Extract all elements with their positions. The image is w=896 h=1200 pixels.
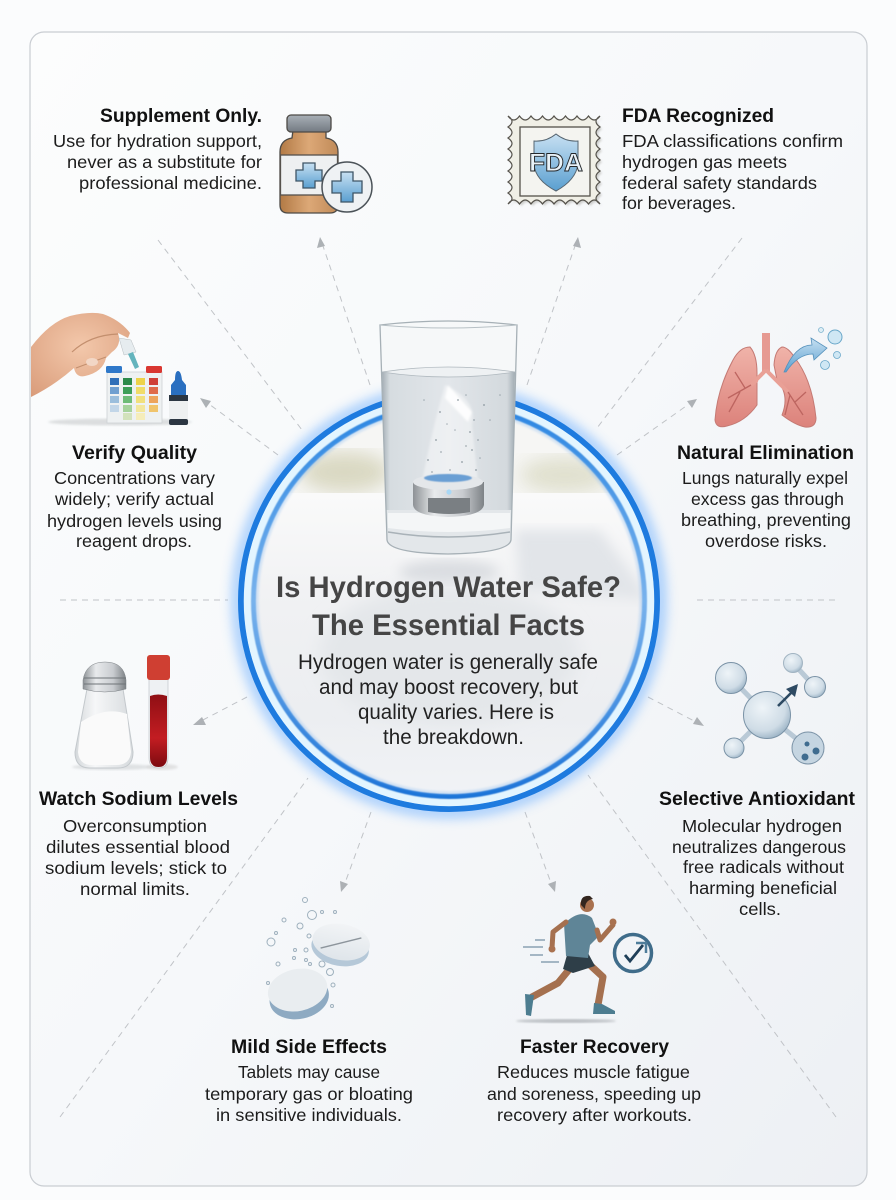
text block	[45, 816, 230, 899]
icon: lungs	[715, 328, 842, 427]
text block: neutralizes dangerous	[672, 837, 846, 857]
title	[276, 571, 621, 642]
panel: natural elimination	[677, 328, 854, 551]
icon: progress badge	[614, 934, 652, 972]
central circle	[238, 390, 660, 813]
text block: breathing, preventing	[681, 510, 851, 530]
text block: cells.	[739, 899, 781, 919]
heading: Faster Recovery	[520, 1037, 669, 1058]
text block: Molecular hydrogen	[682, 816, 842, 836]
panel: mild side effects	[205, 898, 413, 1125]
text block: sodium levels; stick to	[45, 858, 227, 878]
heading: Mild Side Effects	[231, 1037, 387, 1058]
circle interior photo	[260, 448, 641, 750]
panel: watch sodium levels	[39, 655, 238, 899]
heading: Selective Antioxidant	[659, 789, 856, 810]
icon: blood test tube	[146, 655, 178, 770]
text block: reagent drops.	[76, 531, 192, 551]
text block: Tablets may cause	[238, 1062, 380, 1082]
text block: FDA classifications confirm	[622, 131, 843, 151]
text block: normal limits.	[80, 879, 190, 899]
glass of hydrogen water	[380, 321, 517, 554]
text block: recovery after workouts.	[497, 1105, 692, 1125]
text block: temporary gas or bloating	[205, 1084, 413, 1104]
text block: overdose risks.	[705, 531, 827, 551]
intro text: quality varies. Here is	[358, 701, 554, 724]
text block: Reduces muscle fatigue	[497, 1062, 690, 1082]
heading: Watch Sodium Levels	[39, 789, 238, 810]
connector lines and arrows	[60, 238, 836, 1117]
text block: hydrogen gas meets	[622, 152, 787, 172]
text block: in sensitive individuals.	[216, 1105, 402, 1125]
icon: medicine bottle	[280, 115, 372, 213]
text block	[672, 816, 846, 919]
icon: runner	[516, 896, 616, 1023]
text block: Lungs naturally expel	[682, 468, 848, 488]
text block: for beverages.	[622, 193, 736, 213]
icon: molecule	[716, 654, 826, 764]
intro text: the breakdown.	[383, 726, 524, 749]
icon: FDA stamp: FDA	[529, 149, 583, 177]
heading: Supplement Only.	[100, 106, 262, 127]
text block: free radicals without	[683, 857, 844, 877]
text block: excess gas through	[691, 489, 844, 509]
text block: widely; verify actual	[54, 489, 214, 509]
text block: never as a substitute for	[67, 152, 262, 172]
text block: Use for hydration support,	[53, 131, 262, 151]
arrowheads	[193, 237, 704, 892]
text block: Overconsumption	[63, 816, 207, 836]
heading: Natural Elimination	[677, 443, 854, 464]
text block	[53, 131, 262, 193]
text block: and soreness, speeding up	[487, 1084, 701, 1104]
intro text	[298, 651, 598, 749]
title: Is Hydrogen Water Safe?	[276, 571, 621, 604]
intro text: and may boost recovery, but	[319, 676, 578, 699]
text block: dilutes essential blood	[46, 837, 230, 857]
text block: professional medicine.	[79, 173, 262, 193]
panel: faster recovery	[487, 896, 701, 1125]
icon: tablets	[264, 898, 373, 1025]
panel: FDA recognized	[508, 106, 843, 213]
bubbles column	[422, 385, 478, 482]
tablet device	[413, 474, 484, 517]
title: The Essential Facts	[312, 609, 585, 642]
ring glow	[238, 390, 660, 812]
panel: verify quality	[31, 313, 222, 551]
icon: FDA stamp	[508, 116, 602, 206]
text block: federal safety standards	[622, 173, 817, 193]
intro text: Hydrogen water is generally safe	[298, 651, 598, 674]
text block: Concentrations vary	[54, 468, 215, 488]
text block: harming beneficial	[689, 878, 837, 898]
text block	[487, 1062, 701, 1125]
panel: selective antioxidant	[659, 654, 856, 919]
text block	[622, 131, 843, 213]
panel: supplement only	[53, 106, 372, 213]
text block	[681, 468, 851, 551]
ring	[241, 393, 657, 809]
text block	[47, 468, 222, 551]
heading: FDA Recognized	[622, 106, 774, 127]
text block: hydrogen levels using	[47, 511, 222, 531]
text block	[205, 1062, 413, 1125]
heading: Verify Quality	[72, 443, 197, 464]
icon: hand and test kit	[31, 313, 192, 426]
icon: salt shaker	[72, 662, 152, 770]
